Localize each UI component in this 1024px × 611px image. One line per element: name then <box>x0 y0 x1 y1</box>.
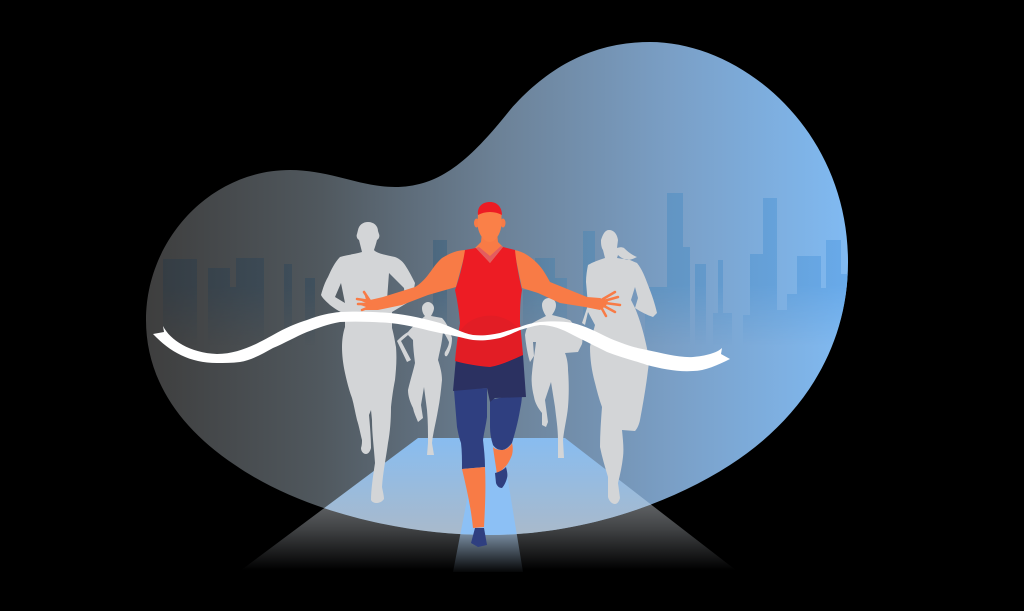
shorts <box>453 355 526 402</box>
right shoe <box>495 467 507 488</box>
right leg raised <box>490 393 522 450</box>
left shoe <box>471 528 487 547</box>
left hand fingers <box>357 292 372 310</box>
silhouette: small left runner <box>397 302 452 455</box>
head <box>478 212 502 242</box>
left leg <box>454 388 487 469</box>
shirt <box>455 247 523 367</box>
road inside spotlight <box>324 438 651 535</box>
left arm <box>357 250 466 310</box>
right arm <box>514 250 608 310</box>
left calf <box>462 467 485 528</box>
neck <box>475 232 504 264</box>
collar <box>476 246 503 263</box>
finish ribbon <box>153 312 730 371</box>
road outside spotlight <box>240 438 737 572</box>
silhouette: large right runner <box>582 230 657 504</box>
illustration: runner crossing finish line <box>146 42 848 572</box>
right calf <box>493 443 513 475</box>
main runner <box>357 202 620 547</box>
silhouette: large left runner <box>321 222 415 503</box>
right hand fingers <box>601 292 620 316</box>
ears <box>474 218 506 228</box>
city skyline <box>163 193 848 350</box>
cap <box>478 202 502 215</box>
spotlight blob <box>146 42 848 535</box>
silhouette: small right runner <box>525 298 582 458</box>
shirt shading <box>455 316 523 367</box>
